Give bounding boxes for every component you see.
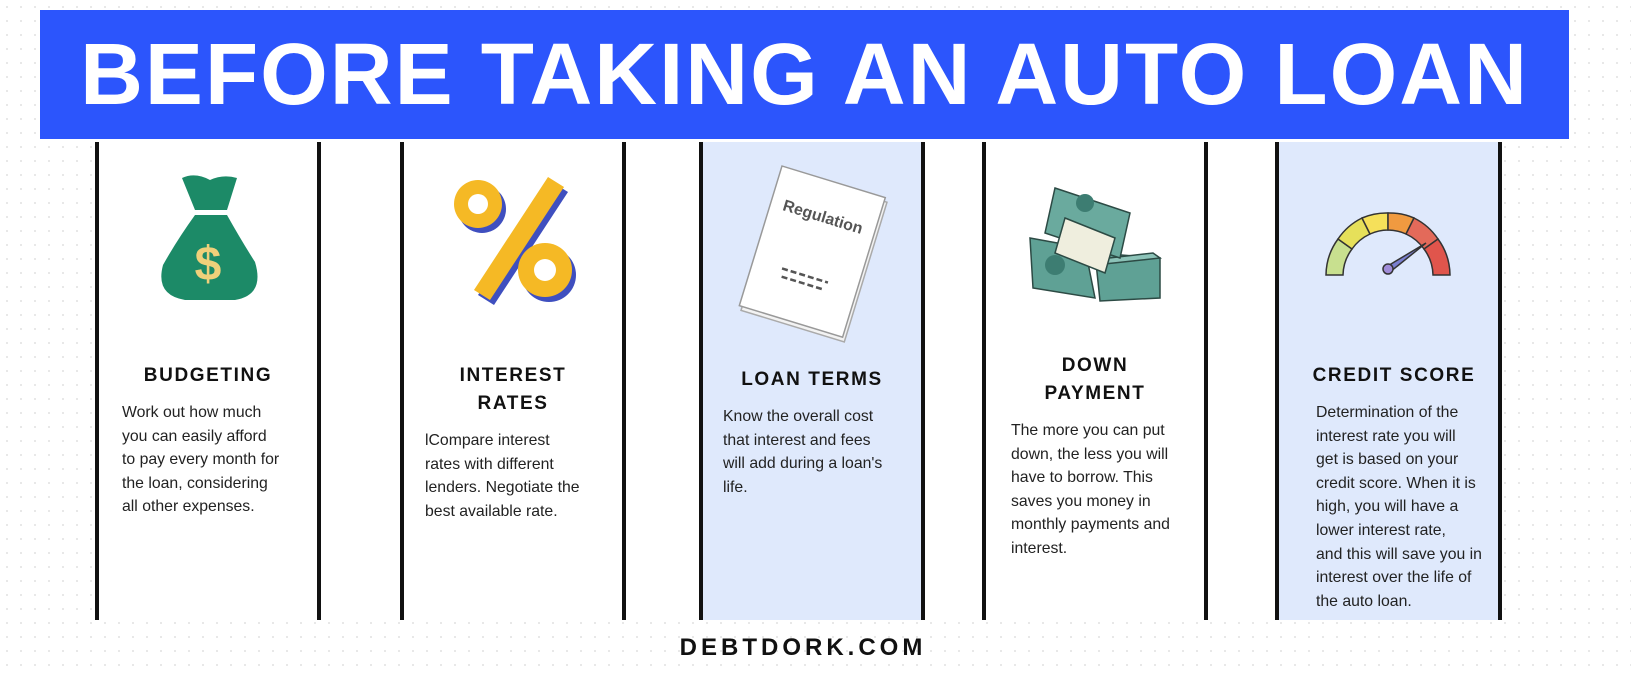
icon: credit gauge bbox=[1325, 212, 1451, 276]
text: credit score: and this will save you in bbox=[1316, 546, 1482, 563]
panel: interest rates bbox=[425, 365, 580, 520]
text: interest rates: best available rate. bbox=[425, 503, 558, 520]
icon: regulation document bbox=[738, 165, 888, 343]
text: credit score: interest over the life of bbox=[1316, 569, 1471, 586]
heading: loan terms: LOAN TERMS bbox=[741, 369, 883, 390]
heading: interest rates bbox=[460, 365, 566, 414]
panel: budgeting bbox=[122, 365, 279, 515]
heading: budgeting: BUDGETING bbox=[144, 365, 272, 386]
icon: money bag bbox=[161, 175, 258, 300]
text: budgeting bbox=[122, 404, 279, 515]
text: loan terms: that interest and fees bbox=[723, 432, 871, 449]
title: BEFORE TAKING AN AUTO LOAN bbox=[80, 26, 1529, 123]
text: down payment: down, the less you will bbox=[1011, 446, 1168, 463]
icon: regulation document: Regulation bbox=[781, 197, 865, 238]
text: credit score: the auto loan. bbox=[1316, 593, 1412, 610]
panel: down payment bbox=[1011, 355, 1170, 557]
text: budgeting: all other expenses. bbox=[122, 498, 255, 515]
text: credit score: interest rate you will bbox=[1316, 428, 1456, 445]
text: loan terms: Know the overall cost bbox=[723, 408, 873, 425]
text: credit score: get is based on your bbox=[1316, 451, 1458, 468]
text: budgeting: you can easily afford bbox=[122, 428, 267, 445]
panel backgrounds bbox=[104, 142, 1498, 620]
text: down payment: monthly payments and bbox=[1011, 516, 1170, 533]
heading: down payment bbox=[1045, 355, 1145, 404]
icon: percent bbox=[454, 177, 576, 305]
text: loan terms: will add during a loan's bbox=[723, 455, 882, 472]
text: loan terms: life. bbox=[723, 479, 748, 496]
heading: down payment: DOWN bbox=[1062, 355, 1128, 376]
text: interest rates: rates with different bbox=[425, 456, 554, 473]
text: down payment bbox=[1011, 422, 1170, 557]
footer: DEBTDORK.COM bbox=[680, 634, 926, 661]
text: credit score: credit score. When it is bbox=[1316, 475, 1476, 492]
heading: interest rates: RATES bbox=[478, 393, 548, 414]
text: down payment: saves you money in bbox=[1011, 493, 1151, 510]
text: down payment: The more you can put bbox=[1011, 422, 1165, 439]
panel: credit score bbox=[1313, 365, 1482, 610]
text: down payment: interest. bbox=[1011, 540, 1067, 557]
text: loan terms bbox=[723, 408, 882, 496]
text: down payment: have to borrow. This bbox=[1011, 469, 1153, 486]
text: budgeting: Work out how much bbox=[122, 404, 261, 421]
text: credit score: high, you will have a bbox=[1316, 498, 1458, 515]
text: credit score: Determination of the bbox=[1316, 404, 1458, 421]
text: credit score: lower interest rate, bbox=[1316, 522, 1446, 539]
heading: credit score: CREDIT SCORE bbox=[1313, 365, 1475, 386]
text: budgeting: to pay every month for bbox=[122, 451, 279, 468]
heading: down payment: PAYMENT bbox=[1045, 383, 1145, 404]
icon: cash stacks bbox=[1029, 187, 1162, 302]
panel: loan terms bbox=[723, 369, 883, 496]
text: interest rates: lCompare interest bbox=[425, 432, 550, 449]
heading: interest rates: INTEREST bbox=[460, 365, 566, 386]
text: interest rates: lenders. Negotiate the bbox=[425, 479, 580, 496]
text: interest rates bbox=[425, 432, 580, 520]
icon: money bag: $ bbox=[195, 238, 222, 291]
title banner bbox=[40, 10, 1569, 139]
text: budgeting: the loan, considering bbox=[122, 475, 268, 492]
text: credit score bbox=[1316, 404, 1482, 610]
